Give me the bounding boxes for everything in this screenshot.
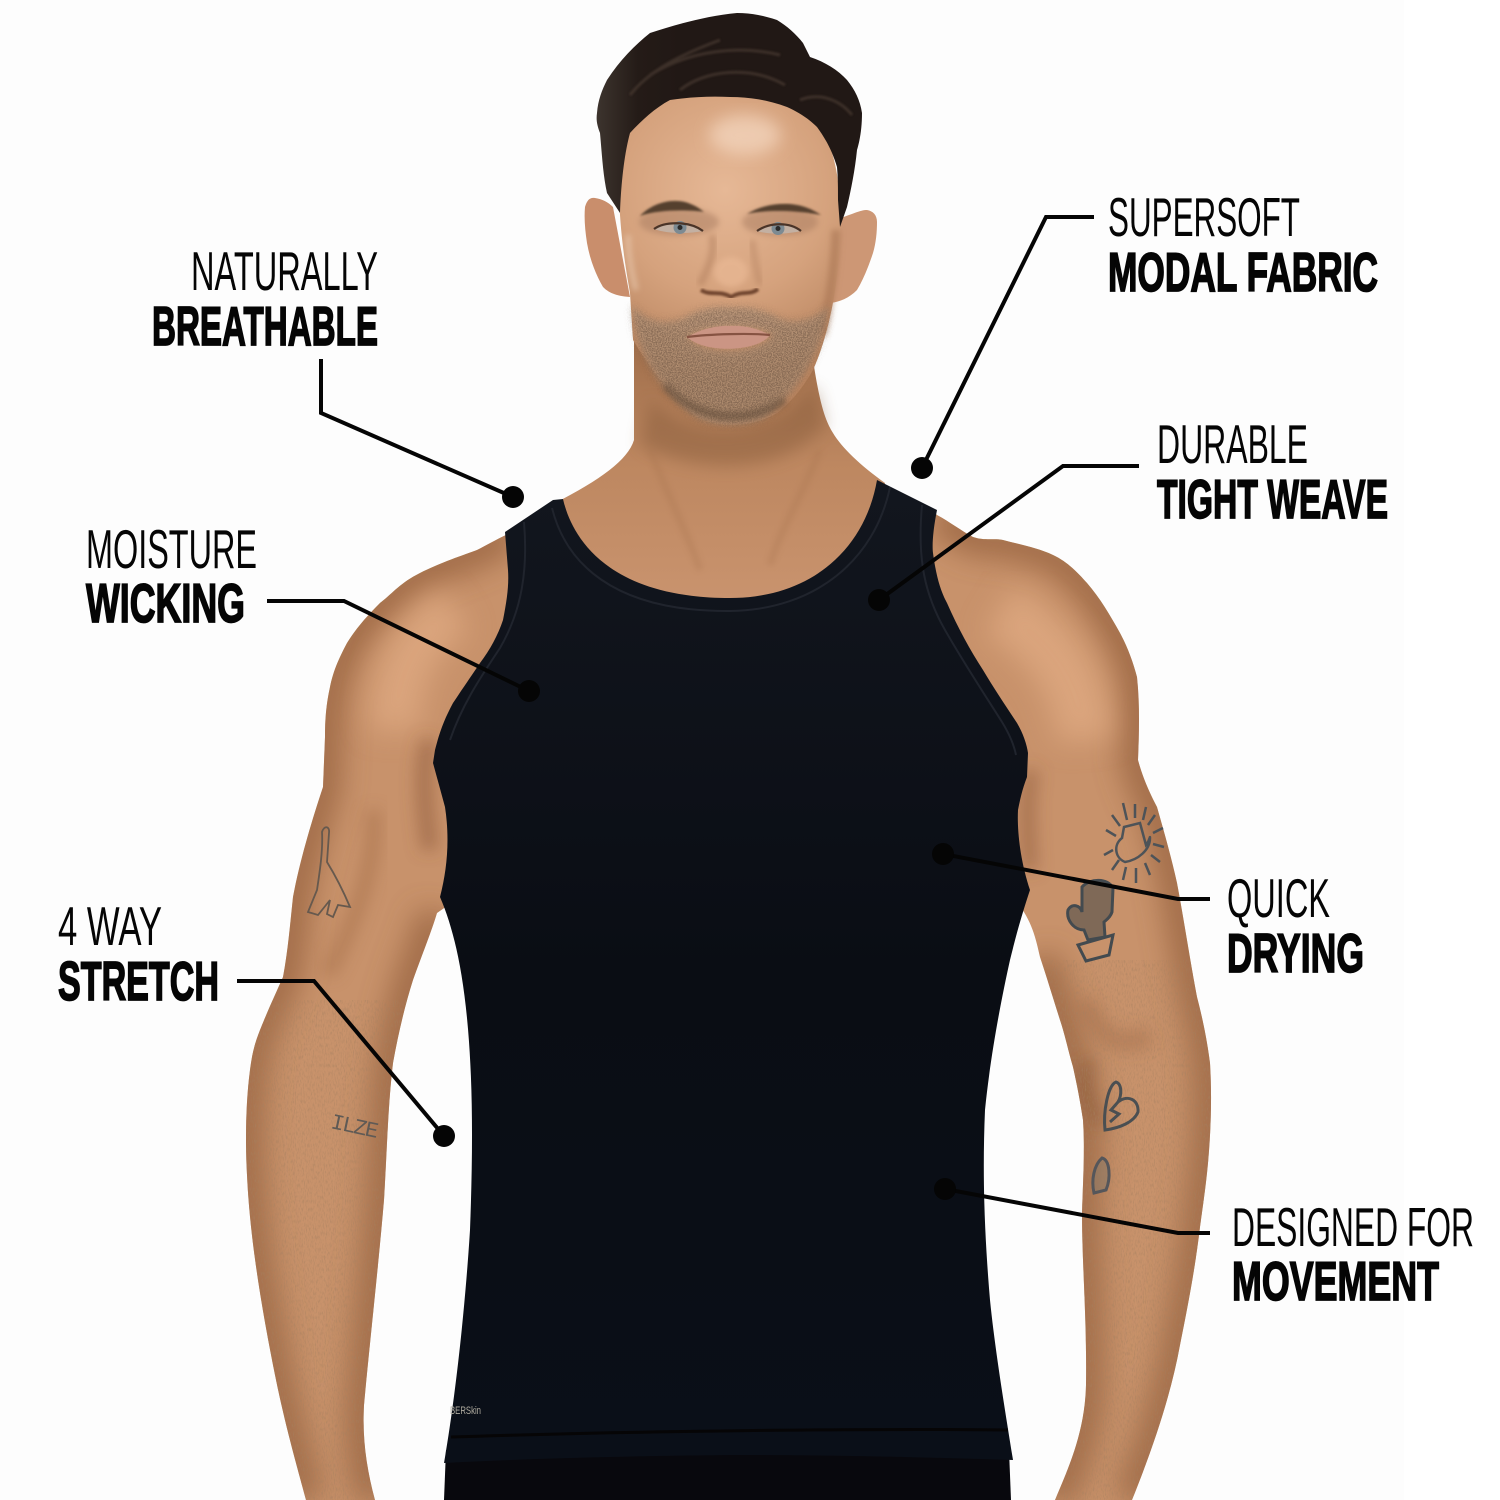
tattoo: cactus [1068, 880, 1113, 961]
leader line [879, 466, 1139, 600]
tattoo: dinosaur [308, 827, 350, 917]
callout: 4 way stretch [58, 895, 455, 1147]
callout: naturally breathable [152, 240, 524, 508]
label text [152, 240, 378, 357]
neck shadow [640, 385, 825, 466]
stubble [632, 305, 829, 425]
label text: QUICK [1227, 867, 1330, 929]
hair highlights [630, 40, 852, 115]
hem stitch [451, 1429, 1008, 1437]
mouth [687, 326, 770, 349]
forehead highlight [709, 115, 781, 155]
tank seams [450, 487, 1016, 755]
arm edge shading [246, 515, 1211, 1500]
marker [911, 457, 933, 479]
forearm hair texture [248, 1000, 406, 1500]
neck and chest [555, 335, 890, 620]
marker [518, 680, 540, 702]
label text: SUPERSOFT [1108, 186, 1300, 248]
label text [58, 895, 219, 1012]
label text: BREATHABLE [152, 295, 378, 357]
callout: moisture wicking [86, 518, 540, 702]
marker [932, 843, 954, 865]
label text: MOISTURE [86, 518, 257, 580]
label text [1232, 1196, 1474, 1312]
marker [502, 486, 524, 508]
face [619, 88, 840, 425]
leader line [321, 359, 513, 497]
leader line [943, 854, 1210, 899]
label text: 4 WAY [58, 895, 162, 957]
label text [86, 518, 257, 634]
left ear [585, 198, 630, 297]
arms [230, 490, 1230, 1500]
label text [1108, 186, 1378, 303]
label text: DURABLE [1157, 413, 1308, 475]
nose [700, 235, 760, 297]
marker [868, 589, 890, 611]
tank logo: BERSkin [450, 1405, 481, 1417]
man figure [230, 13, 1230, 1500]
label text: WICKING [86, 572, 245, 634]
tattoo: skull [1093, 1158, 1109, 1193]
label text [1227, 867, 1364, 984]
face side shading [628, 230, 836, 335]
callout: supersoft modal fabric [911, 186, 1378, 479]
marker [433, 1125, 455, 1147]
right ear [830, 210, 877, 303]
label text [1157, 413, 1388, 530]
marker [934, 1178, 956, 1200]
leader line [945, 1189, 1210, 1233]
neck muscles [650, 450, 820, 570]
armpit shading [424, 740, 1150, 1125]
label text: NATURALLY [191, 240, 378, 302]
tattoo: sun hat [1104, 803, 1164, 883]
tank top [433, 480, 1030, 1463]
callout: durable tight weave [868, 413, 1388, 611]
label text: DRYING [1227, 922, 1364, 984]
shoulder highlights [395, 610, 1085, 740]
callout: designed for movement [934, 1178, 1474, 1312]
triceps crease [328, 810, 374, 975]
leader line [237, 981, 444, 1136]
hair [597, 13, 862, 227]
shorts [444, 1450, 1011, 1500]
label text: STRETCH [58, 950, 219, 1012]
leader line [267, 601, 529, 691]
tattoo: heart [1105, 1082, 1138, 1130]
eyes and brows [639, 201, 821, 236]
tattoo: ILZE: ILZE [329, 1110, 381, 1145]
leader line [922, 217, 1094, 468]
callout: quick drying [932, 843, 1364, 984]
